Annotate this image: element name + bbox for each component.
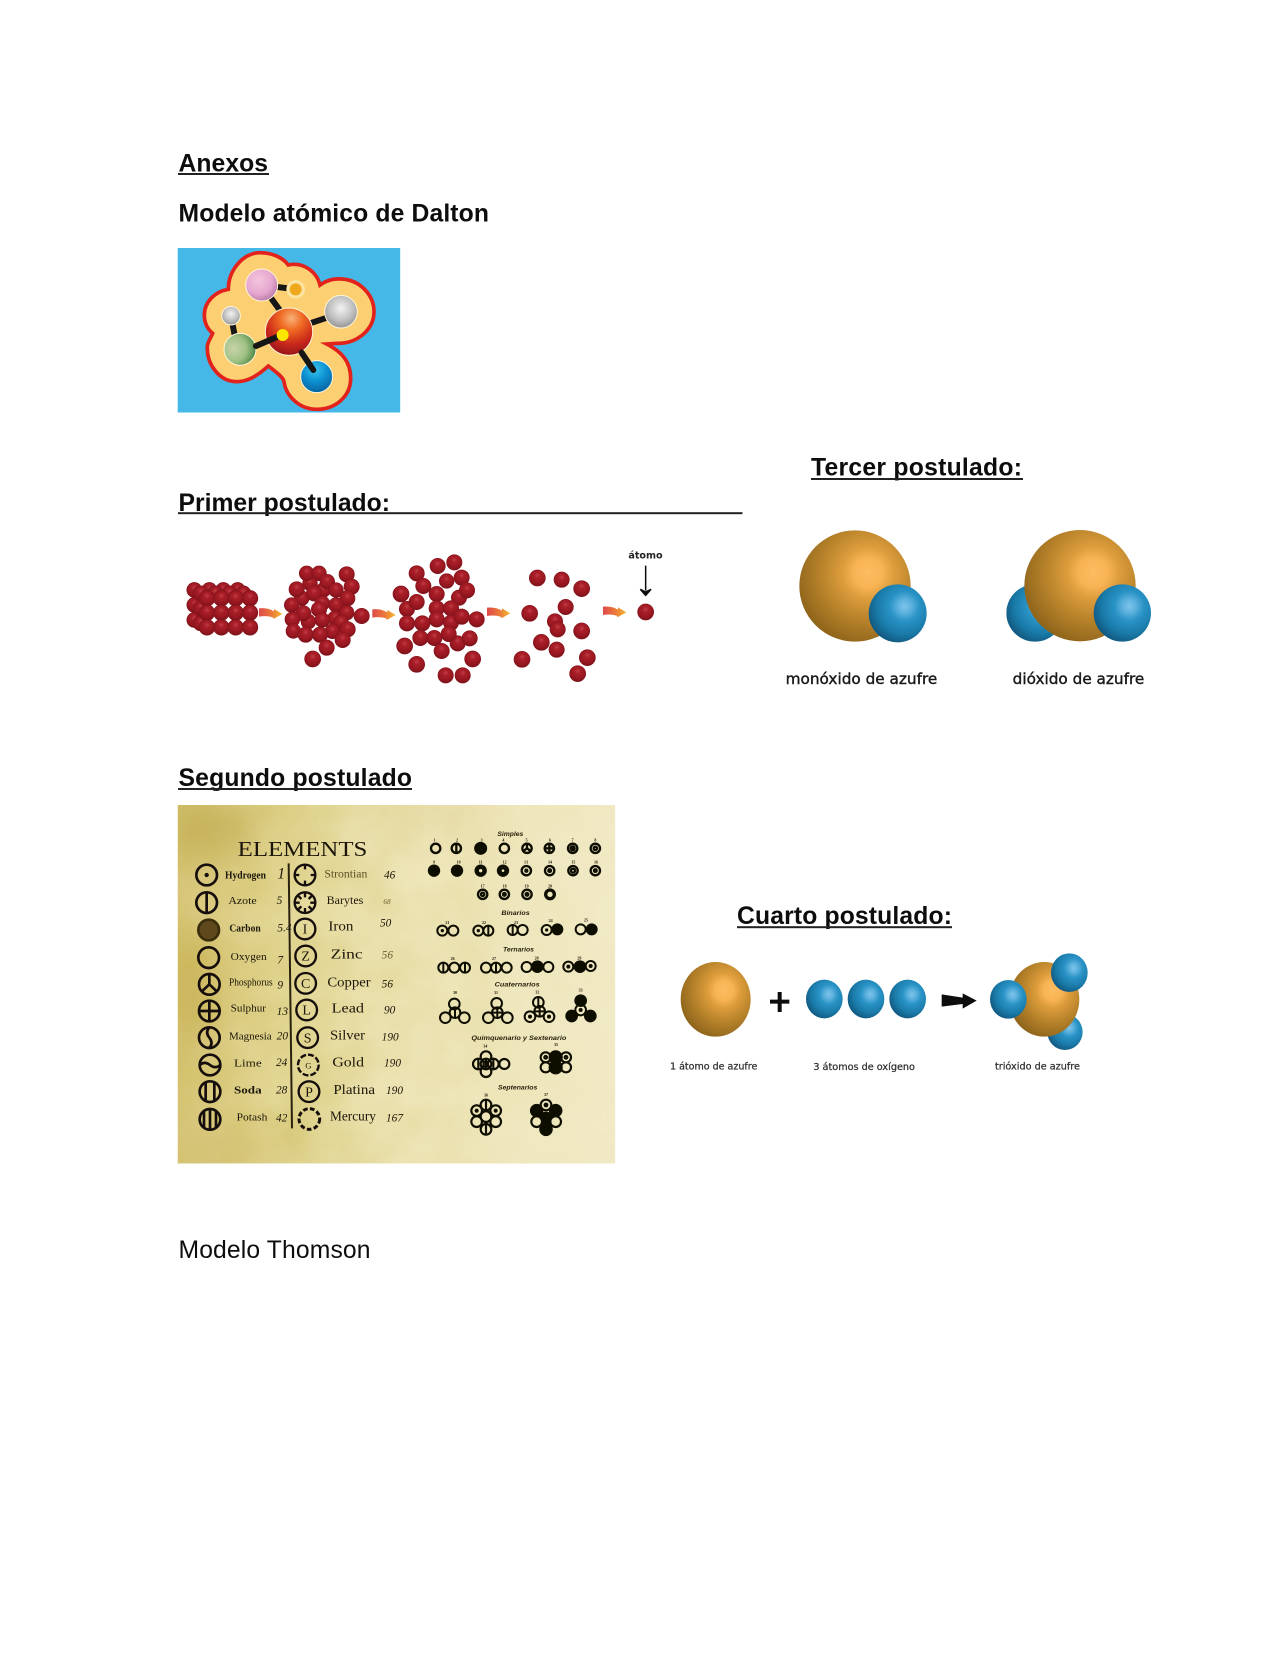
single atom <box>638 604 654 620</box>
atomic weights: right column: 56 <box>382 949 393 961</box>
symbol letters: I <box>303 923 308 938</box>
atom numbering: 23 <box>514 920 518 925</box>
atomic weights: right column: 46 <box>384 869 396 881</box>
atom numbering: 3 <box>481 838 483 843</box>
atomic weights: left column: 9 <box>277 979 283 991</box>
element names: right column: Strontian <box>324 867 367 881</box>
atom numbering: 2 <box>456 838 458 843</box>
plus sign <box>770 992 789 1012</box>
element names: left column: Sulphur <box>231 1004 266 1015</box>
atom numbering: 24 <box>549 918 553 923</box>
title: ELEMENTS: ELEMENTS <box>238 839 367 861</box>
element names: left column: Oxygen <box>231 952 267 963</box>
atom numbering: 21 <box>445 920 449 925</box>
labels <box>670 1060 1080 1073</box>
atom numbering: 33 <box>579 987 583 992</box>
loose cluster <box>284 566 369 667</box>
divider rule <box>289 863 292 1128</box>
element names: right column: Copper <box>327 976 371 991</box>
symbols: right column <box>295 865 320 1129</box>
text: Modelo Thomson: Modelo Thomson <box>178 1237 370 1264</box>
element names: left column: Phosphorus <box>229 978 273 989</box>
atom numbering: 8 <box>594 838 596 843</box>
atom numbering: 10 <box>457 860 461 865</box>
atom numbering: 1 <box>433 838 435 843</box>
symbol letters <box>301 923 313 1100</box>
atom numbering: 9 <box>433 860 435 865</box>
atom numbering: 19 <box>525 883 529 888</box>
atomic weights: left column: 28 <box>276 1084 288 1096</box>
scattered cluster <box>393 555 484 683</box>
element names: right column: Silver <box>330 1028 365 1043</box>
quaternary atoms <box>440 995 596 1023</box>
atom numbering: 30 <box>453 990 457 995</box>
atom numbering: 12 <box>503 860 507 865</box>
atomic weights: left column: 1 <box>277 865 285 882</box>
atom numbering: 34 <box>483 1043 487 1048</box>
section labels: Quimquenario y Sextenario <box>471 1035 566 1042</box>
atom numbering: 37 <box>544 1092 548 1097</box>
symbol letters: C <box>301 977 310 992</box>
atomic weights: left column: 13 <box>277 1006 288 1018</box>
ternary atoms <box>438 961 596 973</box>
atom numbering: 31 <box>494 990 498 995</box>
labels: 3 átomos de oxígeno <box>813 1061 915 1073</box>
reaction arrow <box>942 993 977 1009</box>
element names: right column: Gold <box>332 1056 364 1071</box>
element names: right column <box>324 867 376 1125</box>
atom numbering: 18 <box>503 883 507 888</box>
atom numbering: 26 <box>451 956 455 961</box>
sulfur trioxide molecule <box>990 953 1088 1050</box>
element names: right column: Barytes <box>327 895 363 907</box>
septenary atoms <box>471 1100 561 1135</box>
atomic weights: left column <box>276 865 292 1125</box>
element names: right column: Lead <box>332 1002 364 1017</box>
symbol letters: S <box>304 1031 312 1046</box>
binary atoms <box>437 924 597 936</box>
arrow: pointing to atom <box>640 566 651 595</box>
image: molecule illustration <box>178 248 400 412</box>
image: Dalton table of elements on parchment <box>160 802 615 1168</box>
symbol letters: G <box>305 1061 311 1071</box>
atom numbering: 27 <box>492 956 496 961</box>
atomic weights: left column: 5.4 <box>277 923 292 935</box>
atom numbering: 14 <box>548 860 552 865</box>
element names: left column: Hydrogen <box>225 870 266 881</box>
element names: left column: Potash <box>237 1113 268 1124</box>
section labels: Simples <box>497 831 524 838</box>
atom numbering: 22 <box>482 920 486 925</box>
atomic weights: left column: 20 <box>277 1030 288 1042</box>
simple atoms <box>429 843 600 899</box>
atom numbering: 20 <box>548 883 552 888</box>
quinary atom <box>473 1051 509 1077</box>
symbol letters: L <box>302 1004 311 1019</box>
diagram: 1 sulfur + 3 oxygen gives sulfur trioxide <box>670 953 1088 1073</box>
atom numbering: 29 <box>577 955 581 960</box>
symbol letters: P <box>305 1085 313 1100</box>
atom numbering: 6 <box>549 838 551 843</box>
atomic weights: right column: 50 <box>380 918 392 930</box>
atom numbering: 5 <box>526 838 528 843</box>
atom numbering: 25 <box>584 917 588 922</box>
atomic weights: left column: 24 <box>276 1057 288 1069</box>
atomic weights: right column: 190 <box>384 1058 401 1070</box>
flow arrows <box>259 606 626 620</box>
element names: right column: Zinc <box>331 947 363 962</box>
diagram: monóxido de azufre: monóxido de azufre <box>786 670 937 688</box>
three oxygen atoms <box>806 980 926 1018</box>
atomic weights: left column: 5 <box>277 895 283 907</box>
cube of packed atoms <box>187 583 258 635</box>
element names: left column <box>225 870 273 1124</box>
section labels: Septenarios <box>498 1084 538 1091</box>
atom numbering: 16 <box>594 860 598 865</box>
diagram: monóxido de azufre <box>786 530 937 688</box>
atomic weights: right column: 68 <box>383 897 391 906</box>
element names: left column: Soda <box>234 1085 262 1096</box>
atom numbering: 4 <box>502 838 504 843</box>
atomic weights: right column: 190 <box>382 1032 399 1044</box>
heading: Cuarto postulado: Cuarto postulado: <box>737 903 952 930</box>
section labels <box>471 831 566 1091</box>
heading: Primer postulado: Primer postulado: <box>178 490 390 517</box>
atom numbering: 11 <box>479 860 483 865</box>
atomic weights: right column: 190 <box>386 1085 403 1097</box>
sextenary atom <box>541 1051 571 1073</box>
diagram: matter divided down to a single atom <box>187 549 663 683</box>
sulfur atom <box>681 962 751 1037</box>
symbols: left column <box>196 865 220 1130</box>
element names: left column: Azote <box>228 896 257 907</box>
heading: Tercer postulado: Tercer postulado: <box>811 455 1022 482</box>
atomic weights: right column <box>380 869 404 1124</box>
diagram: dióxido de azufre <box>997 530 1151 688</box>
atom numbering <box>433 838 598 1098</box>
section labels: Cuaternarios <box>495 982 540 989</box>
atom numbering: 13 <box>524 860 528 865</box>
heading: Segundo postulado: Segundo postulado <box>178 765 412 792</box>
atomic weights: left column: 42 <box>276 1113 288 1125</box>
element names: right column: Mercury <box>330 1110 376 1125</box>
atomic weights: left column: 7 <box>277 954 284 966</box>
atom numbering: 32 <box>535 989 539 994</box>
atomic weights: right column: 56 <box>382 978 393 990</box>
element names: left column: Lime <box>234 1059 262 1070</box>
element names: left column: Carbon <box>229 924 261 935</box>
labels: trióxido de azufre <box>995 1060 1080 1072</box>
heading: Anexos: Anexos <box>178 151 268 178</box>
section labels: Ternarios <box>503 947 534 954</box>
atomic weights: right column: 167 <box>386 1112 404 1124</box>
element names: right column: Platina <box>333 1083 376 1098</box>
atomic weights: right column: 90 <box>384 1004 396 1016</box>
atom numbering: 15 <box>571 860 575 865</box>
atom numbering: 35 <box>554 1042 558 1047</box>
atom numbering: 17 <box>481 883 485 888</box>
symbol letters: Z <box>301 950 310 965</box>
atom numbering: 7 <box>572 838 574 843</box>
diagram: dióxido de azufre: dióxido de azufre <box>1013 670 1144 688</box>
separated atoms <box>514 570 595 682</box>
element names: right column: Iron <box>328 919 354 934</box>
labels: 1 átomo de azufre <box>670 1060 757 1072</box>
atom numbering: 28 <box>535 955 539 960</box>
section labels: Binarios <box>501 910 530 917</box>
label: átomo: átomo <box>628 549 663 561</box>
atom numbering: 36 <box>484 1093 488 1098</box>
element names: left column: Magnesia <box>229 1031 272 1042</box>
heading: Modelo atómico de Dalton: Modelo atómico de Dalton <box>178 201 489 228</box>
